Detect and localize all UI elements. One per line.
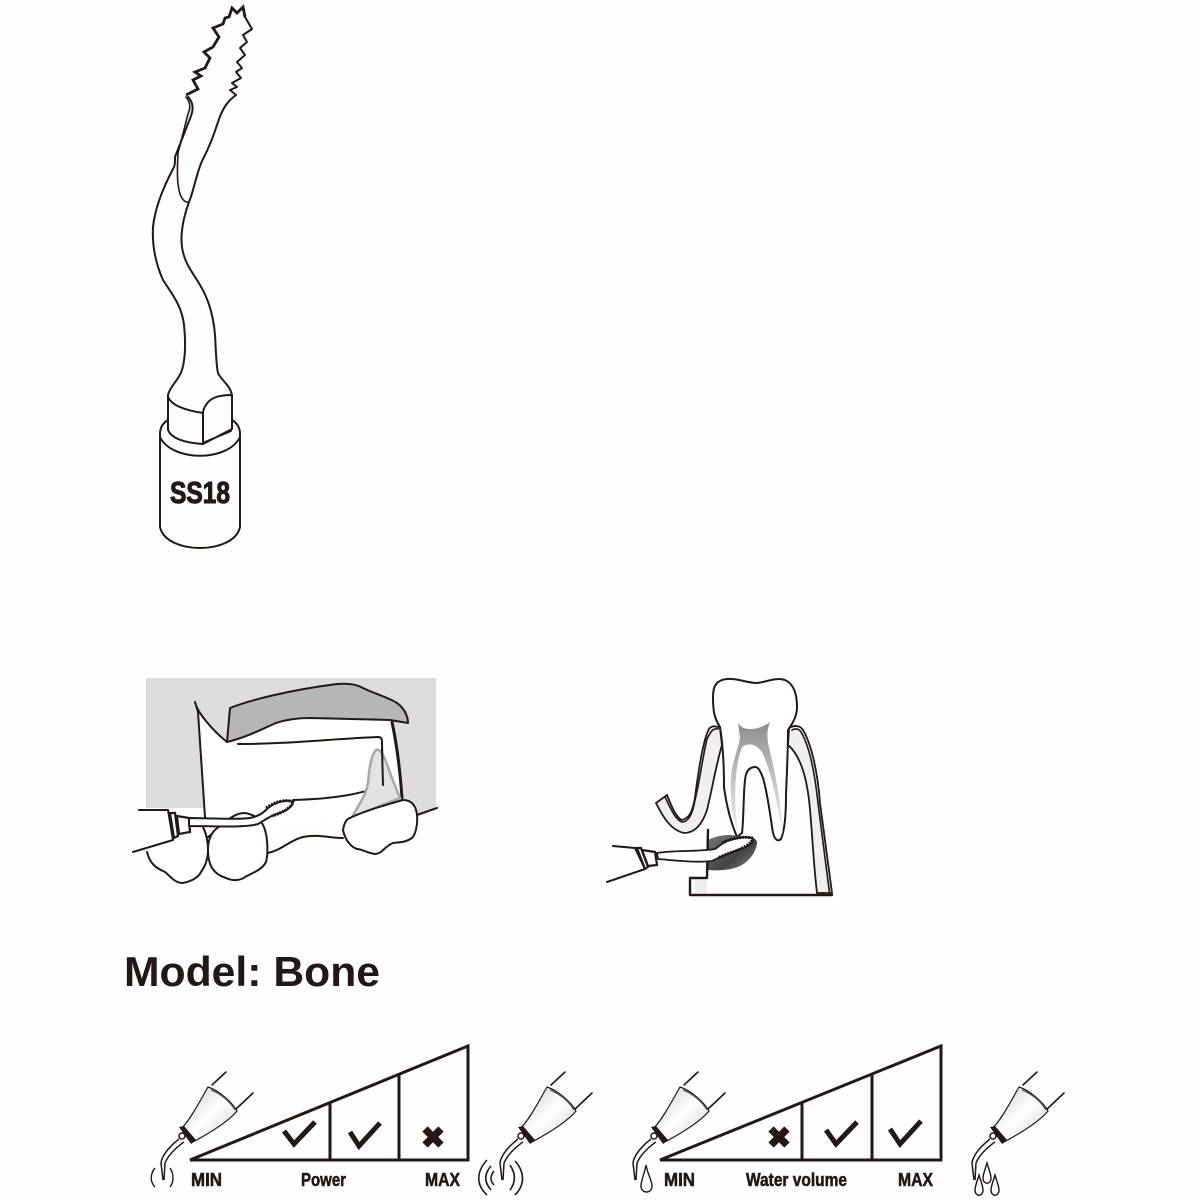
chart: power scale xyxy=(190,1046,468,1190)
panel: tooth root illustration xyxy=(607,679,832,895)
icon: handpiece high water xyxy=(972,1072,1064,1195)
power triangle xyxy=(190,1046,468,1160)
right gum xyxy=(788,726,832,893)
flap edge xyxy=(195,702,227,817)
check: mid water xyxy=(826,1122,857,1144)
serrated tip head xyxy=(186,7,245,95)
title: Model: Bone xyxy=(124,948,380,995)
check: low power xyxy=(284,1122,315,1144)
gray ridge line xyxy=(352,750,400,817)
icon: handpiece low water xyxy=(633,1072,725,1192)
cross: max power xyxy=(425,1129,441,1145)
gum and ridge lines xyxy=(208,808,437,853)
label: Water volume: Water volume xyxy=(746,1170,847,1190)
tip in lesion xyxy=(657,837,753,862)
check: max water xyxy=(890,1121,921,1144)
label: SS18: SS18 xyxy=(170,475,230,510)
tooth middle xyxy=(208,813,267,880)
osteotomy outline xyxy=(238,737,383,800)
tip connector xyxy=(170,813,190,838)
label: MAX: MAX xyxy=(425,1170,460,1190)
collar xyxy=(160,420,240,548)
left gum xyxy=(656,726,722,833)
gum flap xyxy=(227,684,408,742)
tooth left xyxy=(147,827,208,883)
bone tip in use xyxy=(189,801,293,826)
handpiece xyxy=(133,810,173,852)
panel: bone surgery illustration xyxy=(133,678,437,883)
tip shank xyxy=(181,95,236,395)
serrated edge xyxy=(718,837,752,858)
icon: SS18 bone tip xyxy=(153,7,252,548)
cross: low water xyxy=(771,1129,787,1145)
bone window xyxy=(198,706,402,830)
connector xyxy=(637,848,657,869)
handpiece xyxy=(607,846,645,882)
water triangle xyxy=(660,1046,941,1160)
base block xyxy=(695,880,707,893)
pulp chamber xyxy=(731,722,783,835)
icon: handpiece low vibration xyxy=(151,1072,253,1187)
label: MAX: MAX xyxy=(898,1170,933,1190)
lesion xyxy=(708,835,757,870)
label: MIN: MIN xyxy=(664,1170,695,1190)
tooth xyxy=(713,679,797,840)
bone base xyxy=(690,830,832,895)
label: Power: Power xyxy=(301,1170,346,1190)
check: mid power xyxy=(350,1123,380,1146)
icon: handpiece high vibration xyxy=(479,1072,592,1195)
hex neck xyxy=(168,395,232,444)
tooth right xyxy=(343,800,417,854)
serrated right edge xyxy=(230,17,252,95)
label: MIN: MIN xyxy=(191,1170,222,1190)
gray background xyxy=(146,678,436,815)
chart: water volume scale xyxy=(660,1046,941,1190)
